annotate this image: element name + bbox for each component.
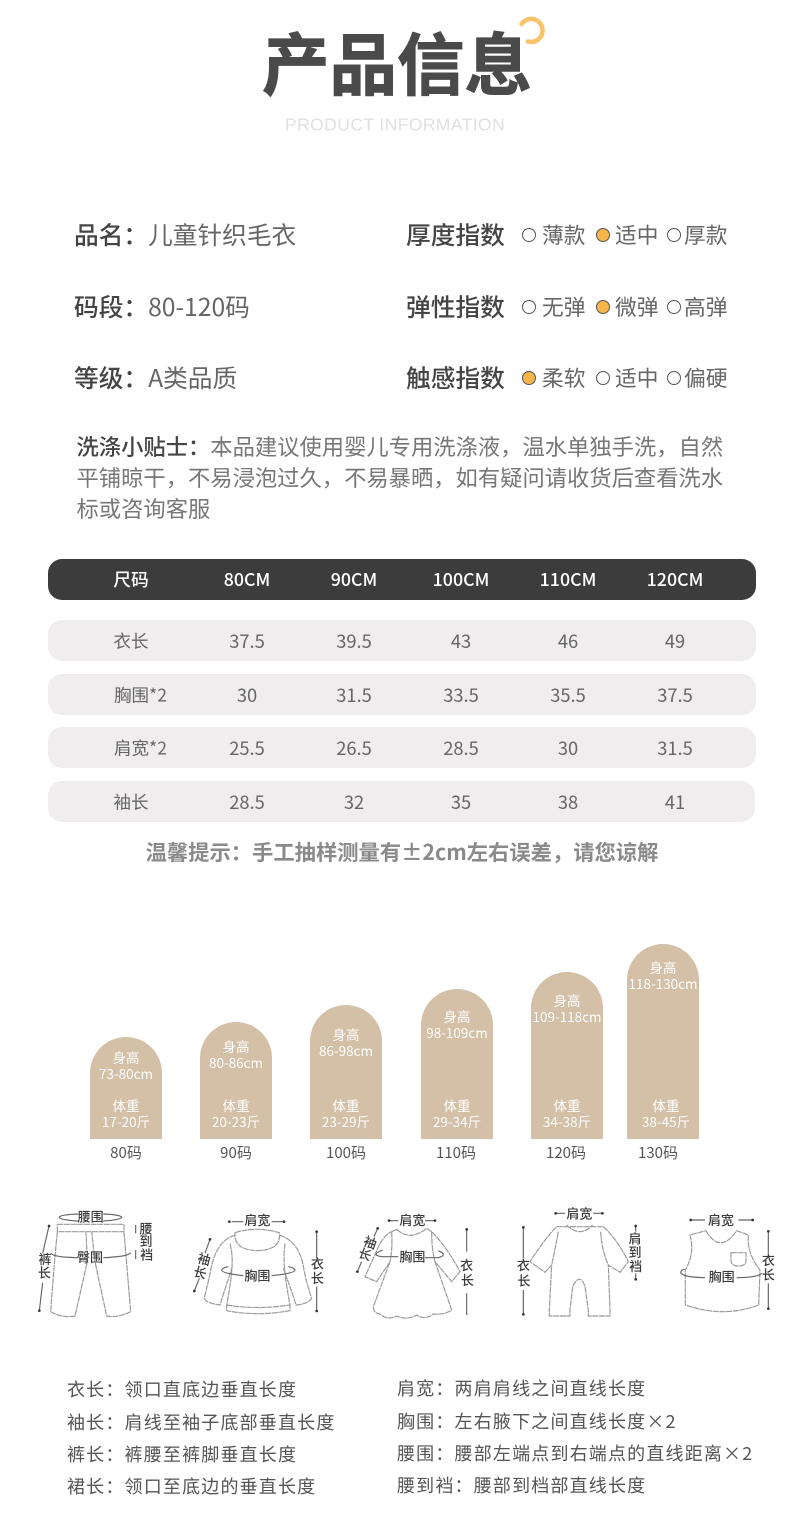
touch options: 偏硬 xyxy=(684,361,727,392)
row: shoulder: 31.5 xyxy=(657,734,693,760)
arch: size 120: 34-38斤 xyxy=(543,1111,591,1131)
row: shoulder: 26.5 xyxy=(336,734,372,760)
table header xyxy=(48,559,756,600)
row: shoulder: 28.5 xyxy=(443,734,479,760)
icon: pants: 腰围 xyxy=(78,1206,104,1225)
arch: size 110: 29-34斤 xyxy=(433,1111,481,1131)
arch: size 100: 体重 xyxy=(332,1095,360,1115)
icon: romper: 肩 xyxy=(628,1228,642,1247)
icon: sweater: 长 xyxy=(192,1261,209,1283)
size labels: 80码 xyxy=(110,1142,142,1163)
touch index: 触感指数 xyxy=(406,359,505,395)
arch: size 110 xyxy=(421,989,493,1139)
arch: size 130 xyxy=(627,944,699,1139)
icon: pants: 长 xyxy=(38,1263,51,1282)
arch: size 80: 身高 xyxy=(112,1047,140,1067)
table header: 尺码 xyxy=(113,566,149,592)
row: length: 39.5 xyxy=(336,627,372,653)
icon: pants: 裆 xyxy=(140,1244,153,1263)
row: chest: 33.5 xyxy=(443,681,479,707)
arch: size 110: 身高 xyxy=(444,1006,470,1026)
icon: dress: 袖 xyxy=(361,1231,380,1253)
elasticity options: 高弹 xyxy=(684,290,727,321)
table header: 100CM xyxy=(433,566,489,592)
elasticity options: 微弹 xyxy=(615,290,658,321)
arch: size 130: 身高 xyxy=(650,957,676,977)
arch: size 130: 体重 xyxy=(652,1095,680,1115)
icon: romper: 肩宽 xyxy=(566,1203,592,1222)
arch: size 100: 86-98cm xyxy=(319,1040,373,1060)
icon: pants xyxy=(38,1206,153,1317)
icon: pants: 到 xyxy=(139,1231,153,1250)
touch options xyxy=(522,361,727,392)
row: shoulder: 肩宽*2 xyxy=(114,735,167,760)
table header: 120CM xyxy=(647,566,703,592)
icon: sweater: 肩宽 xyxy=(244,1210,270,1229)
touch options: 适中 xyxy=(615,361,658,392)
arch: size 80 xyxy=(90,1037,162,1139)
subtitle: PRODUCT INFORMATION xyxy=(285,114,505,134)
icon: vest: 长 xyxy=(762,1265,775,1284)
icon: dress: 长 xyxy=(461,1270,474,1289)
panel: size guide arches xyxy=(90,944,699,1139)
quality grade: 等级：A类品质 xyxy=(74,359,237,395)
icon: sweater: 袖 xyxy=(196,1248,213,1269)
size labels xyxy=(110,1142,678,1163)
arch: size 90: 80-86cm xyxy=(209,1052,263,1072)
size labels: 110码 xyxy=(436,1142,476,1163)
size labels: 130码 xyxy=(638,1142,678,1163)
row: chest: 胸围*2 xyxy=(114,682,167,707)
icon: pants: 裤 xyxy=(38,1249,52,1268)
icon: dress: 胸围 xyxy=(399,1247,425,1266)
row: chest: 31.5 xyxy=(336,681,372,707)
row: sleeve xyxy=(48,781,755,822)
icon: dress: 衣 xyxy=(460,1255,473,1274)
icon: dress xyxy=(356,1210,474,1318)
row: sleeve: 35 xyxy=(451,788,471,814)
row: chest: 37.5 xyxy=(657,681,693,707)
arch: size 90 xyxy=(200,1022,272,1139)
arch: size 110: 体重 xyxy=(444,1095,470,1115)
size range: 码段：80-120码 xyxy=(74,288,250,324)
icon: sweater: 长 xyxy=(311,1268,324,1287)
table header: 80CM xyxy=(224,566,270,592)
icon: vest: 肩宽 xyxy=(708,1210,734,1229)
arch: size 120: 体重 xyxy=(554,1095,580,1115)
arch: size 80: 73-80cm xyxy=(99,1063,153,1083)
size labels: 90码 xyxy=(220,1142,252,1163)
icon: vest xyxy=(681,1210,775,1312)
row: length: 衣长 xyxy=(114,628,148,653)
row: length: 49 xyxy=(665,627,685,653)
table header: 110CM xyxy=(540,566,596,592)
icon: pants: 腰 xyxy=(139,1218,153,1237)
row: length xyxy=(48,620,756,661)
arch: size 100 xyxy=(310,1005,382,1139)
definition: shoulder: 肩宽：两肩肩线之间直线长度 xyxy=(397,1375,646,1401)
icon: vest: 衣 xyxy=(762,1250,775,1269)
row: sleeve: 32 xyxy=(344,788,364,814)
definition: rise: 腰到裆：腰部到档部直线长度 xyxy=(397,1472,646,1498)
row: sleeve: 袖长 xyxy=(114,789,148,814)
definition: waist: 腰围：腰部左端点到右端点的直线距离×2 xyxy=(397,1440,753,1466)
row: sleeve: 38 xyxy=(558,788,578,814)
icon: sweater: 胸围 xyxy=(244,1266,270,1285)
table header: 90CM xyxy=(331,566,377,592)
arch: size 120 xyxy=(531,972,603,1139)
thickness options: 厚款 xyxy=(684,218,727,249)
row: chest xyxy=(48,674,756,715)
icon: romper: 裆 xyxy=(629,1256,642,1275)
arch: size 90: 体重 xyxy=(222,1095,250,1115)
thickness options xyxy=(522,218,727,249)
thickness index: 厚度指数 xyxy=(406,216,505,252)
size labels: 100码 xyxy=(326,1142,366,1163)
elasticity options: 无弹 xyxy=(542,290,585,321)
elasticity index: 弹性指数 xyxy=(406,288,505,324)
icon: sweater xyxy=(192,1210,324,1314)
washing tips: 标或咨询客服 xyxy=(76,492,210,524)
thickness options: 薄款 xyxy=(542,218,585,249)
measurement note: 温馨提示：手工抽样测量有±2cm左右误差，请您谅解 xyxy=(146,836,658,867)
icon: sweater: 衣 xyxy=(311,1253,324,1272)
size labels: 120码 xyxy=(546,1142,586,1163)
arch: size 130: 38-45斤 xyxy=(642,1111,690,1131)
icon: vest: 胸围 xyxy=(709,1267,735,1286)
icon: romper xyxy=(517,1203,642,1316)
row: chest: 35.5 xyxy=(550,681,586,707)
icon: pants: 臀围 xyxy=(77,1247,103,1266)
row: sleeve: 41 xyxy=(665,788,685,814)
washing tips xyxy=(76,430,723,524)
row: sleeve: 28.5 xyxy=(229,788,265,814)
panel: measurement definitions xyxy=(67,1375,753,1499)
definition: length: 衣长：领口直底边垂直长度 xyxy=(67,1376,297,1402)
row: shoulder: 30 xyxy=(558,734,578,760)
row: length: 37.5 xyxy=(229,627,265,653)
icon: romper: 衣 xyxy=(517,1255,530,1274)
washing tips: 洗涤小贴士：本品建议使用婴儿专用洗涤液，温水单独手洗，自然 xyxy=(76,430,723,462)
definition: pants: 裤长：裤腰至裤脚垂直长度 xyxy=(67,1441,297,1467)
arch: size 130: 118-130cm xyxy=(628,973,698,993)
row: chest: 30 xyxy=(237,681,257,707)
panel: garment measurement diagrams xyxy=(38,1203,775,1319)
product name: 品名：儿童针织毛衣 xyxy=(74,216,296,252)
arch: size 120: 身高 xyxy=(554,990,580,1010)
elasticity options xyxy=(522,290,727,321)
row: length: 43 xyxy=(451,627,471,653)
row: length: 46 xyxy=(558,627,578,653)
panel: size table xyxy=(48,559,756,822)
icon: dress: 长 xyxy=(356,1242,375,1265)
icon: romper: 长 xyxy=(517,1270,531,1289)
arch: size 100: 身高 xyxy=(332,1024,360,1044)
row: shoulder xyxy=(48,727,756,768)
icon: dress: 肩宽 xyxy=(399,1210,425,1229)
arch: size 110: 98-109cm xyxy=(426,1022,488,1042)
arch: size 80: 体重 xyxy=(112,1095,140,1115)
definition: skirt: 裙长：领口至底边的垂直长度 xyxy=(67,1473,316,1499)
definition: chest: 胸围：左右腋下之间直线长度×2 xyxy=(397,1408,677,1434)
panel: product attributes xyxy=(74,216,727,395)
row: shoulder: 25.5 xyxy=(229,734,265,760)
washing tips: 平铺晾干，不易浸泡过久，不易暴晒，如有疑问请收货后查看洗水 xyxy=(76,461,723,493)
definition: sleeve: 袖长：肩线至袖子底部垂直长度 xyxy=(67,1409,336,1435)
arch: size 80: 17-20斤 xyxy=(102,1111,150,1131)
touch options: 柔软 xyxy=(542,361,585,392)
arch: size 100: 23-29斤 xyxy=(322,1111,370,1131)
arch: size 90: 身高 xyxy=(222,1036,250,1056)
icon: romper: 到 xyxy=(628,1242,642,1261)
arch: size 120: 109-118cm xyxy=(532,1006,602,1026)
title: 产品信息 xyxy=(262,12,532,110)
arch: size 90: 20-23斤 xyxy=(212,1111,260,1131)
icon: orange ring accent xyxy=(519,16,545,44)
thickness options: 适中 xyxy=(615,218,658,249)
